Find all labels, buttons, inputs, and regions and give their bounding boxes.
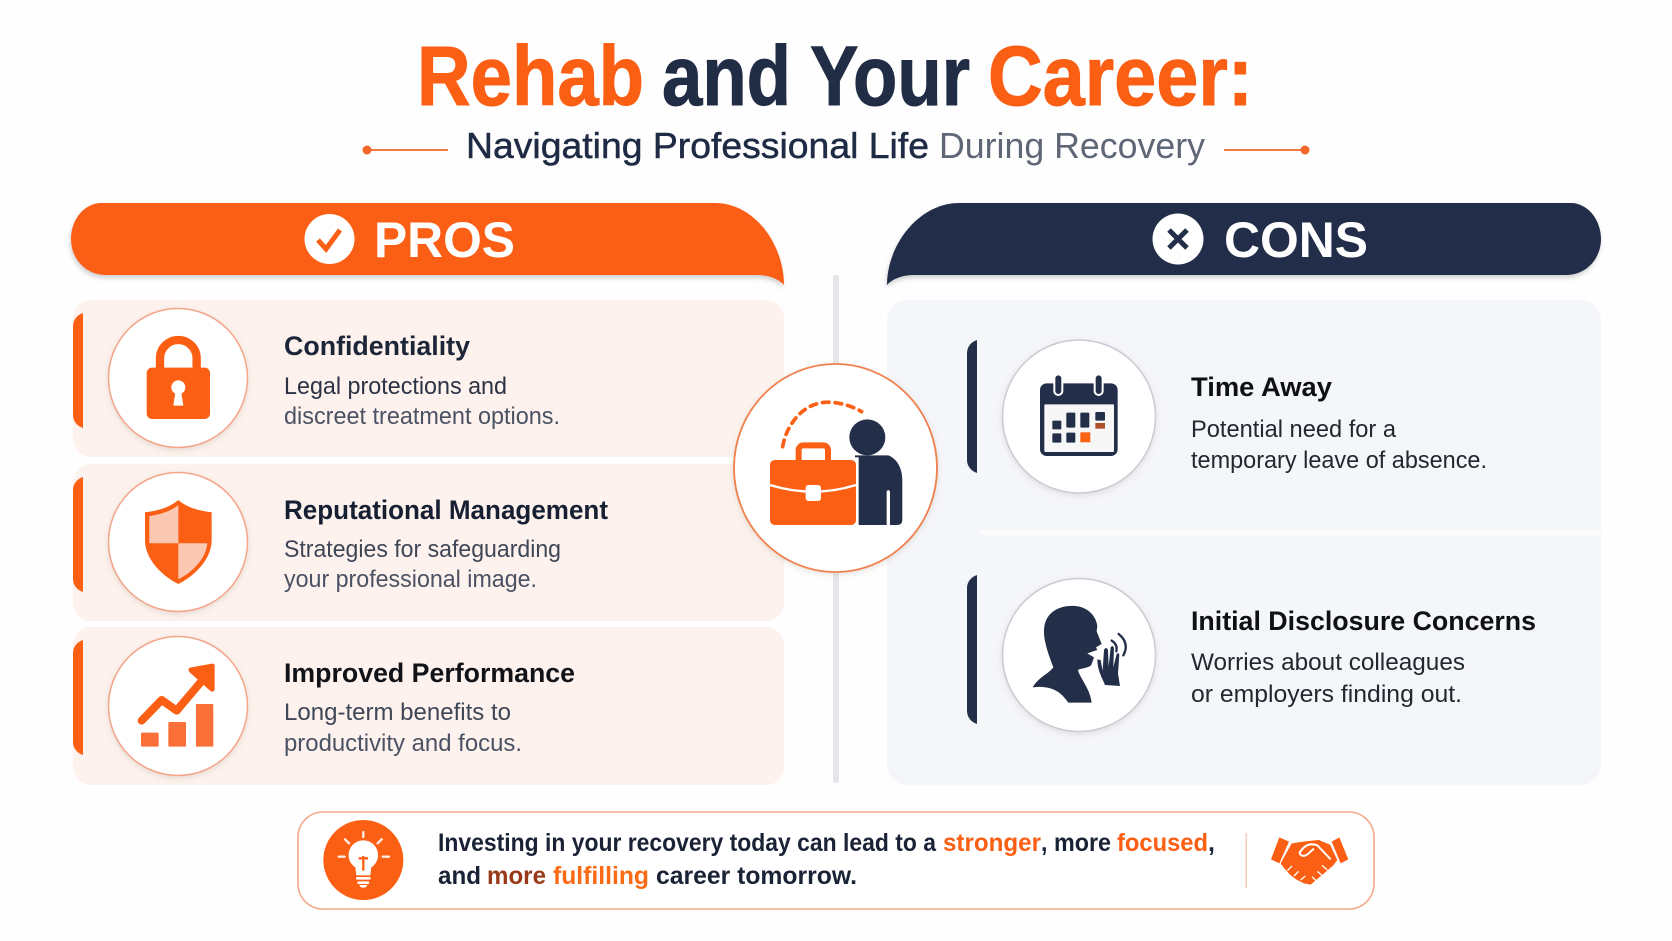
- icon: handshake: [1271, 837, 1348, 885]
- pro card: confidentiality: [73, 300, 784, 457]
- subtitle: During Recovery: [939, 125, 1205, 166]
- center divider: [833, 275, 839, 783]
- pros header: [71, 203, 784, 285]
- icon: calendar: [1040, 374, 1118, 456]
- callout text: career tomorrow.: [656, 862, 857, 890]
- panel: cons: [887, 300, 1601, 785]
- callout text: , more: [1041, 829, 1111, 857]
- title: and: [662, 29, 791, 123]
- text: reputational management: Strategies for safeguarding: [284, 536, 561, 563]
- callout text: focused: [1117, 829, 1208, 857]
- text: time away: temporary leave of absence.: [1191, 447, 1487, 474]
- callout text: more: [487, 862, 546, 890]
- callout text: stronger: [943, 829, 1041, 857]
- callout text: ,: [1208, 829, 1215, 857]
- title: Your: [810, 29, 970, 123]
- text: initial disclosure concerns: Worries about colleagues: [1191, 649, 1465, 676]
- text: confidentiality: discreet treatment options.: [284, 403, 560, 430]
- text: initial disclosure concerns: Initial Disclosure Concerns: [1191, 606, 1536, 636]
- icon: lock: [147, 340, 210, 419]
- icon: x circle: [1152, 214, 1204, 264]
- title: Career:: [988, 29, 1253, 123]
- icon: check circle: [304, 214, 354, 264]
- icon: briefcase and person: [770, 402, 902, 527]
- callout text: [438, 829, 1215, 890]
- con item: initial disclosure concerns: [967, 575, 1536, 732]
- pro card: improved performance: [73, 627, 784, 785]
- subtitle decoration right: [1224, 146, 1310, 154]
- callout text: and: [438, 862, 481, 890]
- pros label: PROS: [374, 212, 515, 268]
- subtitle: Navigating Professional Life: [466, 125, 929, 166]
- text: initial disclosure concerns: or employers finding out.: [1191, 681, 1462, 708]
- cons label: CONS: [1224, 212, 1368, 268]
- callout text: fulfilling: [553, 862, 649, 890]
- text: confidentiality: Legal protections and: [284, 373, 507, 400]
- text: time away: Potential need for a: [1191, 416, 1397, 443]
- pro card: reputational management: [73, 464, 784, 621]
- text: reputational management: Reputational Management: [284, 495, 608, 525]
- text: time away: [1191, 372, 1487, 474]
- text: confidentiality: [284, 331, 560, 430]
- icon: whispering person: [1033, 606, 1126, 703]
- icon: light bulb: [323, 820, 403, 900]
- text: improved performance: Long-term benefits to: [284, 699, 511, 726]
- text: confidentiality: Confidentiality: [284, 331, 470, 361]
- cons header: [887, 203, 1601, 285]
- title: Rehab: [417, 29, 644, 123]
- text: improved performance: productivity and focus.: [284, 730, 522, 757]
- text: improved performance: [284, 658, 575, 757]
- subtitle: [466, 125, 1205, 166]
- icon: growth chart: [141, 664, 215, 747]
- text: reputational management: [284, 495, 608, 593]
- central career circle: [734, 364, 937, 572]
- title: [417, 29, 1253, 123]
- text: reputational management: your professional image.: [284, 566, 537, 593]
- icon: shield: [145, 500, 212, 584]
- footer callout: [298, 812, 1374, 909]
- subtitle decoration left: [362, 146, 448, 154]
- callout text: Investing in your recovery today can lead to a: [438, 829, 937, 857]
- text: improved performance: Improved Performance: [284, 658, 575, 688]
- text: time away: Time Away: [1191, 372, 1332, 402]
- con item: time away: [967, 340, 1487, 493]
- text: initial disclosure concerns: [1191, 606, 1536, 708]
